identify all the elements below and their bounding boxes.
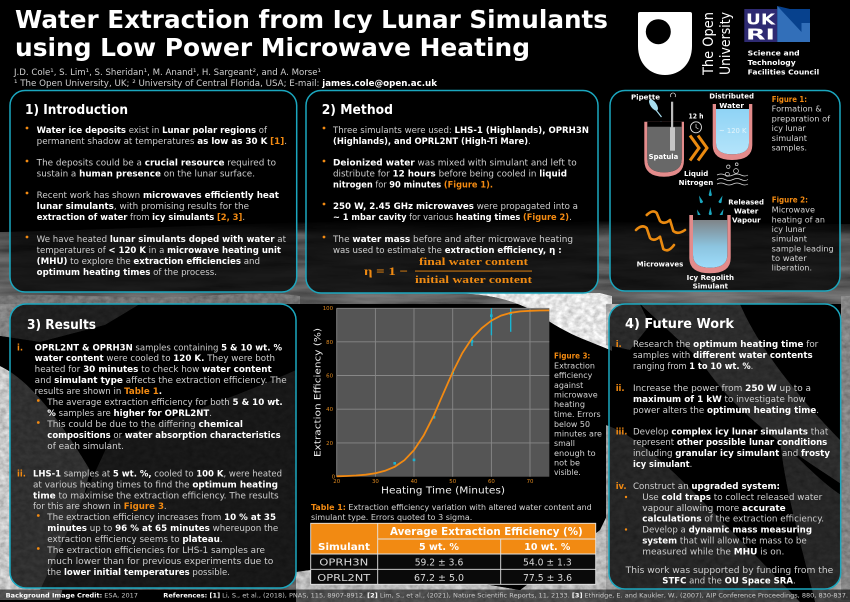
chart: tick labels: 60	[326, 374, 334, 380]
text: results: OPRL2NT & OPRH3N samples containing 5 & 10 wt. %	[35, 342, 283, 352]
text: future work: Develop complex icy lunar simulants that	[633, 426, 829, 436]
released water vapour label: Water	[734, 208, 759, 216]
figure 3 caption: visible.	[554, 468, 581, 477]
text: results: the lower initial temperatures possible.	[47, 567, 230, 577]
text: future work: including granular icy simulant and frosty	[633, 448, 831, 458]
figure 3 caption: microwave	[554, 390, 598, 400]
chart: tick labels: 20	[333, 479, 341, 485]
text: results: of each simulant.	[47, 441, 124, 451]
text: results: LHS-1 samples at 5 wt. %, cooled to 100 K, were heated	[33, 468, 282, 478]
logo: UKRI STFC: RI	[746, 26, 775, 44]
text: future work: Use cold traps to collect released water	[642, 492, 823, 502]
liquid nitrogen label and bubbles: Nitrogen	[679, 179, 714, 187]
figure 1 diagram: pipette and beaker with spatula: Spatula	[649, 153, 678, 161]
text: introduction: (MHU) to explore the extraction efficiencies and	[37, 256, 260, 266]
figure 2 caption: simulant	[772, 235, 807, 244]
heading: introduction: 1) Introduction	[25, 103, 128, 118]
logo: UKRI STFC	[744, 6, 819, 76]
text: future work: calculations of the extraction efficiency.	[642, 514, 824, 524]
footer: credits and references: Background Image Credit: ESA, 2017	[6, 593, 138, 600]
figure 3 caption	[554, 352, 602, 477]
table 1: extraction efficiency: OPRH3N	[319, 558, 368, 568]
text: results: minutes up to 96 % at 65 minutes whereupon the	[47, 523, 278, 533]
list markers: future work: iv.	[616, 481, 627, 491]
text: results: water content were cooled to 120 K. They were both	[35, 353, 275, 363]
chart: extraction efficiency vs heating time	[314, 306, 549, 496]
figure 2 caption: Microwave	[772, 206, 815, 215]
figure 1 caption: preparation of	[772, 114, 830, 123]
logo: The Open University: University	[718, 12, 734, 75]
table 1: extraction efficiency: 54.0 ± 1.3	[523, 558, 572, 568]
formula: extraction efficiency: η = 1 −	[364, 264, 408, 278]
chart: tick labels: 100	[323, 306, 334, 312]
text: method: (Highlands), and OPRL2NT (High-Ti Mare).	[333, 136, 531, 146]
formula: extraction efficiency: final water content	[419, 257, 529, 268]
text: introduction: lunar simulants , with promising results for the	[37, 201, 249, 211]
text: method: was used to estimate the extraction efficiency, η :	[333, 245, 562, 255]
text: results: much lower than for previous experiments due to	[47, 556, 273, 566]
table 1: extraction efficiency: Simulant	[318, 542, 370, 553]
list markers: results: i.	[17, 342, 23, 352]
text: introduction: temperatures of < 120 K in a microwave heating unit	[37, 245, 281, 255]
logo: UKRI STFC: UK	[746, 10, 777, 28]
text: results: extraction efficiency seems to plateau.	[47, 534, 223, 544]
figure 1 caption: Formation &	[772, 105, 822, 114]
authors and affiliations: ¹ The Open University, UK; ² University of Central Florida, USA; E-mail: james.cole@open.ac.uk	[14, 78, 437, 88]
table caption	[311, 503, 592, 522]
title: Water Extraction from Icy Lunar Simulants	[15, 5, 608, 34]
authors and affiliations: J.D. Cole¹, S. Lim¹, S. Sheridan¹, M. Anand¹, H. Sargeant², and A. Morse¹	[13, 67, 321, 77]
figure 1 diagram: beaker of distributed water: ~ 120 K	[719, 127, 747, 135]
table caption: simulant type. Errors quoted to 3 sigma.	[311, 513, 472, 522]
table 1: extraction efficiency: 77.5 ± 3.6	[523, 573, 572, 584]
table caption: Table 1: Extraction efficiency variation with altered water content and	[311, 503, 592, 512]
chart: tick labels: 70	[527, 479, 534, 485]
figure 3 caption: heating	[554, 400, 585, 409]
heading: results: 3) Results	[27, 318, 96, 333]
figure 3 caption: minutes are	[554, 430, 602, 438]
heading: future work: 4) Future Work	[625, 317, 734, 332]
table 1: extraction efficiency: 5 wt. %	[419, 542, 459, 553]
list markers: results	[17, 342, 40, 550]
microwaves label: Microwaves	[637, 261, 683, 269]
text: future work: Develop a dynamic mass measuring	[642, 524, 812, 534]
figure 1 caption: Figure 1:	[772, 95, 807, 104]
text: future work: maximum of 1 kW to investigate how	[633, 394, 806, 404]
table 1: extraction efficiency: 10 wt. %	[524, 542, 570, 553]
released water vapour label: Released	[728, 198, 764, 206]
liquid nitrogen label and bubbles: Liquid	[684, 170, 709, 178]
table 1: extraction efficiency: OPRL2NT	[317, 573, 371, 584]
text: future work: Research the optimum heating time for	[633, 339, 819, 349]
figure 1 caption: simulant	[772, 134, 807, 143]
text: method: distribute for 12 hours before being cooled in liquid	[333, 168, 567, 178]
footer: credits and references: References: [1] Li, S., et al., (2018), PNAS, 115, 8907-8912. [2] Lim, S., et al., (2021), Nature Scientific Reports, 11, 2133. [3] Ethridge, E. and Kaukler, W., (2007), AIP Conference Proceedings, 880, 830-837.	[163, 593, 848, 600]
heading: method: 2) Method	[322, 103, 393, 118]
text: method: Three simulants were used: LHS-1 (Highlands), OPRH3N	[332, 125, 589, 135]
logo: UKRI STFC: Technology	[748, 58, 796, 67]
text: future work	[625, 339, 833, 586]
text: method: The water mass before and after microwave heating	[332, 234, 573, 244]
figure 1 diagram: beaker of distributed water: Distributed	[709, 92, 754, 100]
formula: extraction efficiency	[364, 257, 533, 286]
text: future work: Increase the power from 250 W up to a	[633, 383, 811, 393]
text: results: time to maximise the extraction efficiency. The results	[33, 490, 279, 500]
figure 2 caption: Figure 2:	[772, 196, 808, 205]
figure 2 caption: icy lunar	[772, 225, 807, 234]
text: future work: icy simulant.	[633, 459, 692, 469]
figure 2 caption: liberation.	[772, 264, 812, 273]
text: future work: Construct an upgraded system:	[633, 481, 780, 491]
released water vapour label	[728, 198, 764, 225]
figure 3 caption: efficiency	[554, 371, 593, 380]
figure 3 caption: against	[554, 381, 583, 390]
clock and 12 h label	[688, 112, 704, 133]
text: introduction: extraction of water from icy simulants [2, 3].	[37, 212, 245, 222]
text: method	[332, 125, 589, 255]
text: results	[33, 342, 287, 577]
chart: tick labels	[323, 306, 534, 485]
text: method: Deionized water was mixed with simulant and left to	[333, 158, 577, 168]
text: future work: system that will allow the mass to be	[642, 536, 807, 546]
text: results: at various heating times to find the optimum heating	[33, 480, 278, 490]
figure 3 caption: below 50	[554, 420, 590, 429]
figure 3 caption: enough to	[554, 449, 596, 458]
text: results: The average extraction efficiency for both 5 & 10 wt.	[46, 397, 283, 407]
text: introduction: We have heated lunar simulants doped with water at	[37, 234, 287, 244]
chart: data points and error bars	[393, 308, 512, 465]
chart: tick labels: 40	[411, 479, 418, 485]
arrow: orange chevrons	[690, 136, 707, 160]
figure 1 diagram: pipette and beaker with spatula	[631, 93, 684, 177]
text: results: This could be due to the differing chemical	[46, 419, 243, 429]
figure 1 caption: samples.	[772, 144, 807, 153]
footer strip	[0, 590, 850, 602]
released water vapour label: Vapour	[732, 217, 762, 225]
panel: method	[306, 90, 598, 293]
text: introduction	[36, 125, 287, 277]
logo: The Open University: The Open	[701, 12, 717, 76]
text: future work: vapour allowing more accurate	[642, 503, 786, 513]
chart: y axis title: Extraction Efficiency (%)	[314, 328, 324, 457]
text: future work: power alters the optimum heating time .	[633, 405, 819, 415]
figure 2 caption: heating of an	[772, 215, 825, 224]
icon: microwaves	[636, 211, 685, 250]
bullets: introduction	[26, 127, 28, 238]
text: introduction: Water ice deposits exist in Lunar polar regions of	[37, 125, 268, 135]
list markers: future work: iii.	[616, 426, 627, 436]
clock and 12 h label: 12 h	[688, 112, 704, 120]
text: future work: STFC and the OU Space SRA.	[662, 576, 796, 586]
table 1: extraction efficiency: Average Extraction Efficiency (%)	[390, 526, 583, 538]
text: method: nitrogen for 90 minutes (Figure 1).	[333, 180, 493, 190]
text: results: for this are shown in Figure 3.	[33, 501, 167, 511]
text: results: % samples are higher for OPRL2NT .	[47, 408, 212, 418]
text: results: The extraction efficiencies for LHS-1 samples are	[46, 545, 265, 555]
text: future work: represent other possible lunar conditions	[633, 437, 827, 447]
list markers: results: ii.	[17, 468, 26, 478]
figure 1 diagram: beaker of distributed water: Water	[719, 102, 745, 110]
logo: UKRI STFC: Facilities Council	[748, 68, 819, 76]
chart: tick labels: 30	[372, 479, 379, 485]
list markers: future work: ii.	[616, 383, 625, 393]
panel: figures 1 and 2	[610, 90, 840, 291]
table 1: extraction efficiency	[311, 523, 596, 584]
chart: tick labels: 40	[326, 407, 334, 413]
figure 3 caption: not be	[554, 458, 580, 468]
chart: tick labels: 80	[326, 340, 334, 346]
figure 2 caption: to water	[772, 254, 808, 263]
text: results: compositions or water absorption characteristics	[47, 430, 281, 440]
table 1: extraction efficiency: 59.2 ± 3.6	[415, 558, 463, 568]
liquid nitrogen label and bubbles	[679, 163, 748, 187]
text: future work: measured while the MHU is on.	[642, 546, 784, 556]
figure 1 caption: icy lunar	[772, 124, 807, 133]
title: using Low Power Microwave Heating	[15, 33, 530, 62]
table 1: extraction efficiency: 67.2 ± 5.0	[414, 573, 464, 584]
text: introduction: The deposits could be a crucial resource required to	[36, 158, 276, 168]
chart: tick labels: 50	[449, 479, 457, 485]
figure 2 caption	[772, 196, 834, 273]
panel: results	[10, 304, 296, 588]
text: introduction: permanent shadow at temperatures as low as 30 K [1].	[37, 136, 287, 146]
logo: UKRI STFC: Science and	[748, 48, 800, 58]
list markers: future work: i.	[616, 339, 622, 349]
authors and affiliations	[13, 67, 437, 88]
icon: water vapour drops	[697, 188, 724, 217]
text: method: 250 W, 2.45 GHz microwaves were propagated into a	[333, 201, 578, 211]
figure 2 diagram: beaker of icy regolith	[687, 215, 734, 291]
bullets: method	[323, 127, 325, 238]
chart: fitted curve	[337, 310, 549, 476]
text: future work: This work was supported by funding from the	[625, 565, 833, 575]
text: introduction: sustain a human presence on the lunar surface.	[37, 168, 255, 178]
text: results: and simulant type affects the extraction efficiency. The	[35, 375, 287, 385]
text: results: heated for 30 minutes to check how water content	[35, 364, 272, 374]
figure 2 diagram: beaker of icy regolith: Simulant	[693, 283, 728, 291]
chart: tick labels: 20	[326, 441, 334, 447]
chart: tick labels: 0	[332, 474, 336, 480]
figure 3 caption: time. Errors	[554, 410, 601, 419]
text: method: ~ 1 mbar cavity for various heating times (Figure 2).	[333, 212, 572, 222]
figure 2 diagram: beaker of icy regolith: Icy Regolith	[687, 274, 734, 282]
text: introduction: optimum heating times of the process.	[37, 267, 217, 277]
text: future work: ranging from 1 to 10 wt. %.	[633, 361, 753, 371]
chart: tick labels: 60	[488, 479, 495, 485]
formula: extraction efficiency: initial water content	[415, 275, 533, 286]
logo: The Open University	[638, 12, 734, 76]
figure 3 caption: small	[554, 439, 575, 448]
text: results: The extraction efficiency increases from 10 % at 35	[46, 512, 276, 522]
figure 1 caption	[772, 95, 830, 153]
text: results: results are shown in Table 1.	[35, 386, 162, 396]
figure 2 caption: sample leading	[772, 244, 834, 253]
figure 3 caption: Figure 3:	[554, 352, 590, 361]
title	[15, 5, 608, 62]
panel: introduction	[10, 90, 297, 292]
text: introduction: Recent work has shown microwaves efficiently heat	[37, 190, 279, 200]
text: future work: samples with different water contents	[633, 350, 813, 360]
figure 1 diagram: pipette and beaker with spatula: Pipette	[631, 94, 661, 102]
figure 3 caption: Extraction	[554, 362, 595, 370]
figure 1 diagram: beaker of distributed water	[709, 92, 754, 160]
list markers: future work	[616, 339, 627, 531]
chart: x axis title: Heating Time (Minutes)	[381, 486, 505, 496]
panel: future work	[609, 304, 841, 589]
